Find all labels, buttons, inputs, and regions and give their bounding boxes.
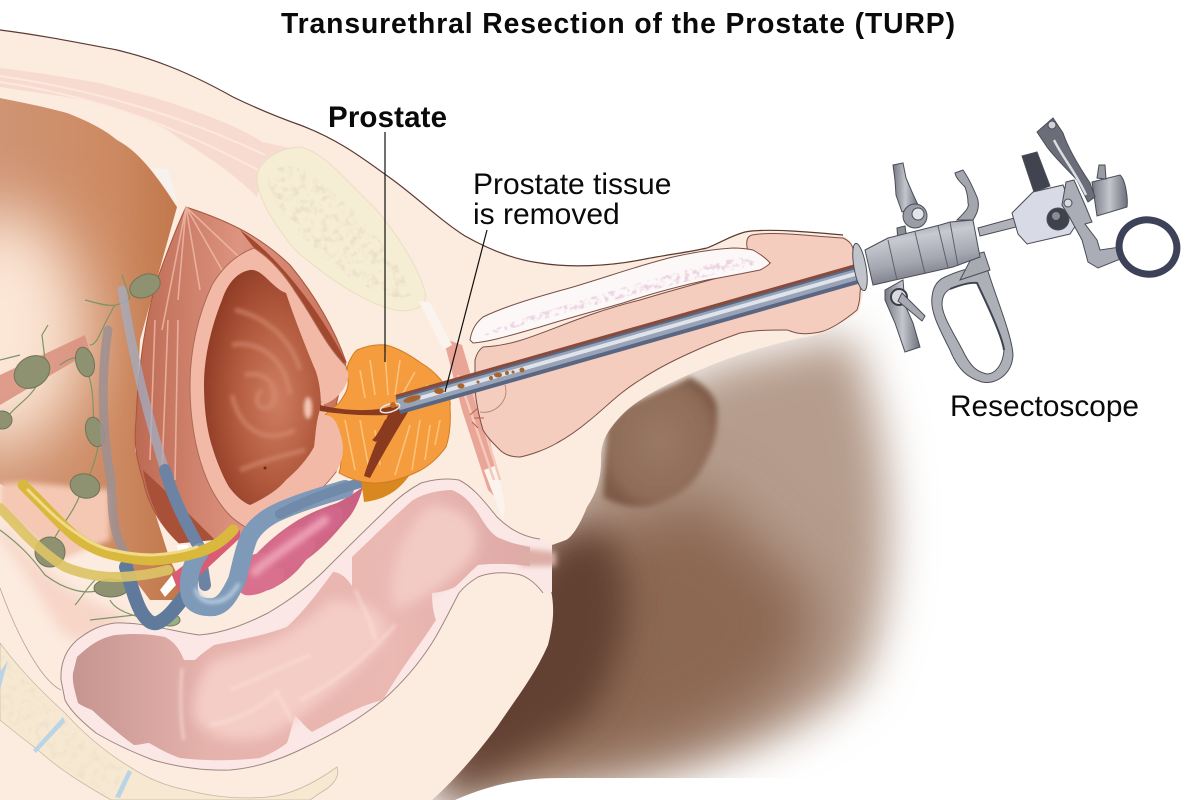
brown body shadow: [430, 335, 1200, 800]
label: resectoscope: Resectoscope: [950, 390, 1139, 423]
urethra: [320, 405, 408, 478]
dark cylinder: [1022, 152, 1050, 192]
seminal vesicle: [238, 487, 363, 595]
title: Transurethral Resection of the Prostate (TURP): [281, 7, 955, 39]
lymph nodes: [0, 269, 180, 626]
lower arm: [1062, 180, 1123, 268]
label: prostate: Prostate: [328, 101, 447, 134]
block: [1012, 185, 1078, 244]
spine: [0, 588, 338, 800]
penis corpus: [470, 233, 861, 457]
finger ring: [1113, 213, 1183, 281]
handle ring: [932, 267, 1013, 383]
pointer lines: [385, 132, 487, 392]
label: prostate tissue is removed: is removed: [473, 198, 620, 231]
bladder: [135, 207, 347, 543]
skin top outline: [0, 30, 843, 266]
rectal wall: [61, 479, 552, 770]
rectum: [61, 479, 556, 770]
lymph network: [0, 275, 150, 620]
abdominal cavity: [0, 98, 190, 641]
white gaps: [160, 545, 190, 597]
white tunica strip: [470, 248, 770, 343]
testicle shape: [603, 377, 717, 507]
pubic bone: [257, 147, 425, 311]
bladder muscle wall: [135, 207, 346, 543]
suspensory ligament: [418, 300, 505, 520]
vessel: [0, 335, 90, 405]
upper valve: [893, 163, 918, 212]
red vessel: [172, 530, 240, 590]
prostate: [320, 345, 450, 502]
lower valve: [885, 280, 920, 352]
bladder inner lining: [190, 248, 347, 530]
bladder cavity: [204, 270, 321, 505]
vas deferens blue: [189, 483, 360, 607]
resectoscope shaft: [379, 272, 862, 428]
rectal lumen: [73, 490, 530, 760]
rod: [978, 217, 1020, 236]
body skin: [0, 30, 863, 800]
yellow tubes: [0, 485, 233, 577]
resectoscope instrument: [850, 118, 1183, 383]
rectal tail fading into shadow: [520, 548, 556, 566]
main barrel: [865, 220, 980, 285]
ureters: [103, 290, 205, 623]
hook: [955, 170, 978, 220]
right cylinder: [1092, 175, 1127, 216]
label: prostate tissue is removed: Prostate tissue: [473, 168, 671, 201]
abdominal muscle band: [0, 68, 300, 197]
upper arm: [1037, 118, 1095, 202]
urethral lining: [322, 365, 348, 405]
